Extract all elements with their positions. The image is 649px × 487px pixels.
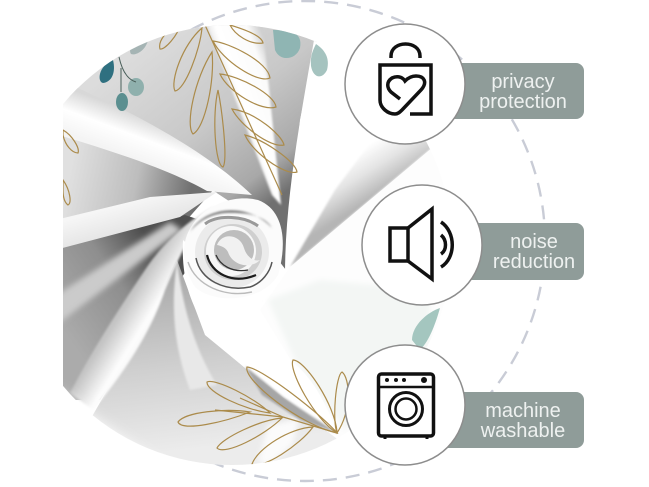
callout: privacy protection [345, 24, 584, 144]
label text: noise [510, 231, 558, 253]
icon circle [345, 345, 465, 465]
dashed outer circle [65, 1, 545, 481]
label pill [440, 63, 584, 119]
label text: privacy [491, 71, 555, 93]
label text: machine [485, 400, 561, 422]
panel: right white fold [285, 41, 316, 270]
label pill [460, 223, 584, 280]
icon: washing machine [378, 374, 434, 439]
panel: rolled fabric centre [184, 198, 283, 298]
callout: machine washable [345, 345, 584, 465]
icon circle [362, 185, 482, 305]
icon: gold leaf sprigs [63, 25, 348, 465]
icon: speaker [390, 209, 452, 279]
callout: noise reduction [362, 185, 584, 305]
panel: left folds [63, 136, 212, 218]
panel: lower white fold [182, 240, 246, 368]
label text: reduction [493, 251, 575, 273]
panel: lower grey fabric [93, 260, 336, 465]
fabric swirl photo [63, 25, 440, 465]
icon: shopping bag with heart [380, 44, 431, 114]
infographic [63, 0, 584, 482]
label pill [440, 392, 584, 448]
label text: protection [479, 91, 567, 113]
icon: teal eucalyptus leaves [100, 30, 440, 350]
icon circle [345, 24, 465, 144]
label text: washable [480, 420, 565, 442]
panel: upper grey fabric [70, 25, 316, 269]
